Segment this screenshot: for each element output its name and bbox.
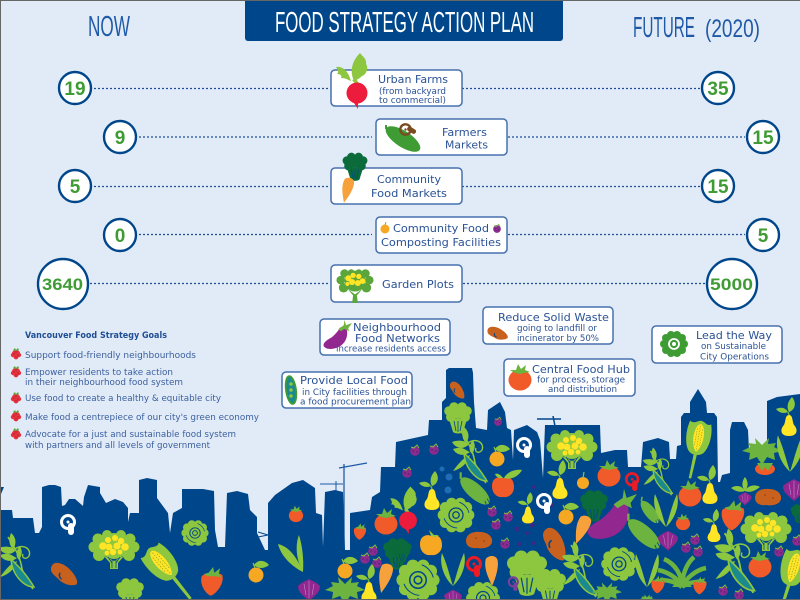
label: composting facilities: Composting Facilities [381,237,501,249]
vegetable: vine left [0,533,34,589]
vegetable: lettuce [601,547,637,581]
heading: future: (2020) [705,15,760,43]
vegetable: leaves [592,582,622,600]
callout text: Central Food Hub [532,364,630,376]
vegetable: tomato [748,551,772,578]
goal 1 [11,348,197,361]
vegetable: sprout [777,435,800,472]
box: composting facilities [376,217,507,253]
vegetable: broccoli [534,569,566,600]
goal 5: Advocate for a just and sustainable food system [25,430,236,440]
city skyline with vegetables [0,368,800,600]
future count 15: 15 [707,177,729,198]
vegetable: beet plant [731,477,760,505]
goal 2: in their neighbourhood food system [25,378,183,388]
vegetable: corn [770,547,800,600]
skyline corner tip [0,487,4,494]
box: farmers markets [376,119,507,155]
now count 5: 5 [70,177,81,198]
vegetable: small berries [402,417,502,478]
vegetable: strawberry [722,500,744,530]
vegetable: strawberries [651,576,707,594]
now count 0: 0 [115,226,125,247]
callout text: Increase residents access [336,344,447,354]
row: urban farms [59,53,734,109]
vegetable: corn [679,419,713,481]
vegetable: palm leaves [742,438,782,465]
vegetable: berries [718,535,800,600]
row: composting facilities [104,217,779,253]
goal 3: Use food to create a healthy & equitable city [25,394,221,404]
vegetable: pear [518,492,534,523]
box: community food markets [331,168,462,204]
callout text: for process, storage [537,376,625,386]
vegetable: kale [392,541,412,563]
vegetable: bush [658,557,706,587]
vegetable: cucumber [634,496,666,527]
label: community food markets: Food Markets [371,188,447,200]
vegetable: leaves [325,577,365,600]
construction cranes [258,416,561,550]
now count 3640 [38,259,88,309]
vegetable: eggplant [588,489,637,539]
callout text: Food Networks [355,333,440,345]
skyline silhouette [0,368,800,599]
future count 35 [702,72,734,104]
callout text [498,312,609,344]
vegetable: sprout [635,554,659,587]
callout text [300,375,411,408]
label: composting facilities [381,223,501,249]
title banner: FOOD STRATEGY ACTION PLAN [275,7,534,39]
future count 35: 35 [707,79,729,100]
vegetable: pear [703,509,720,542]
vegetable: broccoli flower [88,530,140,569]
now count 5 [59,170,91,202]
callout text: on Sustainable [701,342,766,352]
now count 9: 9 [115,128,125,149]
icon: mushroom [398,122,417,139]
label: community food markets [371,174,447,200]
box: urban farms [331,70,462,106]
callout: neighbourhood food networks [320,319,450,355]
vegetable: pear [356,564,377,600]
label: composting facilities: Community Food [393,223,489,235]
callout text: and distribution [548,385,617,395]
icon: sweet potato [487,327,508,340]
label: community food markets: Community [377,174,441,186]
callout text: Lead the Way [696,330,772,342]
vegetable: radish [390,487,417,534]
heading: now: NOW [88,11,130,43]
vegetable: small green [639,594,655,600]
vegetable: vine [714,528,755,593]
vegetable: blue dots [440,466,452,494]
vegetable: vine [643,448,672,495]
icon: tomato [508,364,532,390]
row: farmers markets [104,119,779,157]
callout text: Reduce Solid Waste [498,312,609,324]
future count 5000: 5000 [710,276,753,294]
future count 15 [747,121,779,153]
goal 2: Empower residents to take action [25,368,173,378]
vegetable: mushroom [518,438,530,458]
vegetable: mushroom [509,577,518,591]
vegetable: potato [466,532,492,548]
callout text: in City facilities through [302,388,407,398]
goal 2 [11,366,183,388]
goal 5 [11,428,236,451]
icon: cucumber [382,121,424,157]
vegetable: orange [577,472,589,489]
vegetable: berries [487,506,513,549]
vegetable: orange [248,561,269,582]
now count 3640: 3640 [42,276,83,294]
vegetable: tomato [374,508,398,534]
row: garden plots [38,259,757,309]
icon: orange [380,222,390,234]
vegetable: kale edge [791,504,800,523]
goals heading: Vancouver Food Strategy Goals [25,331,167,341]
vegetable: broccoli [507,551,547,596]
icon: eggplant [324,320,352,349]
vegetable: broccoli [444,402,472,434]
vegetable: orange [558,503,579,524]
vegetable: cucumber [456,472,494,509]
vegetable: lettuce [181,520,209,546]
vegetable: beet [298,579,320,600]
label: urban farms [378,74,448,106]
vegetable: broccoli [116,578,144,600]
vegetable: corn [138,540,202,600]
callout text: City Operations [700,352,770,362]
vegetable: pear [776,397,797,436]
goal 5: with partners and all levels of government [25,441,211,451]
vegetable: vine [452,427,487,483]
icon: berry [493,224,501,233]
label: garden plots: Garden Plots [382,279,454,291]
vegetable: tomato [676,514,690,530]
callout text [696,330,772,362]
callout text: Neighbourhood [353,322,441,334]
vegetable: sweet potato [446,380,469,400]
vegetable: orange [490,445,510,466]
vegetable: mushroom [626,473,638,491]
label: farmers markets: Markets [445,140,488,152]
icon: lettuce [660,331,688,357]
callout text: incinerator by 50% [517,334,599,344]
vegetable: pear [697,465,718,504]
icon: pea pod [284,375,298,405]
vegetable: sprout [654,494,678,527]
label: urban farms: to commercial) [379,96,446,106]
icon: kale [343,153,367,181]
goal 1: Support food-friendly neighbourhoods [25,351,197,361]
icon: broccoli flower [336,269,374,303]
row: community food markets [59,153,734,204]
now count 19 [59,72,91,104]
now count 0 [104,219,136,251]
vegetable: orange [338,557,358,578]
vegetable: berries [681,534,784,557]
goal 4: Make food a centrepiece of our city's green economy [25,413,259,423]
vegetable: dark dots [514,485,554,546]
callout text [336,322,447,354]
vegetable: sprout [441,553,465,586]
label: farmers markets [442,127,488,152]
heading: future: FUTURE [633,12,695,44]
future count 5000 [707,259,757,309]
vegetable: lettuce [466,582,500,600]
vegetable: cucumber [623,514,665,554]
vegetable: tomato [598,460,620,486]
now count 19: 19 [64,79,86,100]
vegetable: mushroom [538,494,550,514]
vegetable: mushroom [468,558,480,577]
vegetable: tomato [289,506,303,522]
vegetable: berries [360,545,382,568]
label: urban farms: (from backyard [379,87,446,97]
label: urban farms: Urban Farms [378,74,448,86]
callout text: a food procurement plan [300,398,411,408]
vegetable: strawberry [354,524,366,540]
vegetable: tomato [678,480,702,506]
callout: central food hub [504,359,635,396]
vegetable: lettuce [396,560,440,600]
callout text [532,364,630,395]
vegetable: potato [755,489,781,505]
future count 5: 5 [758,226,769,247]
vegetable: pear [547,460,568,499]
vegetable: kale [383,538,411,570]
vegetable: carrot [574,515,592,546]
vegetable: sweet potato [536,525,575,563]
icon: radish [336,53,368,109]
vegetable: apple orange [420,530,442,555]
vegetable: kale [580,490,608,522]
callout: provide local food [282,372,412,408]
vegetable: carrot [483,555,504,587]
vegetable: tomato [755,463,775,475]
callout: reduce solid waste [483,307,613,344]
vegetable: beet [658,531,678,551]
label: farmers markets: Farmers [442,127,487,139]
vegetable: sprout [278,535,303,572]
panel: vancouver food strategy goals [11,331,259,451]
future count 15: 15 [752,128,774,149]
vegetable: carrot [379,564,393,593]
box: garden plots [331,265,462,302]
now count 9 [104,121,136,153]
icon: carrot [342,178,354,203]
vegetable: beet [444,590,462,600]
callout: lead the way [652,326,782,363]
vegetable: lettuce [438,498,474,532]
vegetable: broccoli flower [546,430,598,469]
callout text: Provide Local Food [300,375,408,387]
future count 15 [702,170,734,202]
vegetable: sweet potato [48,561,81,587]
title banner [245,1,563,41]
vegetable: vine [562,541,597,597]
future count 5 [747,219,779,251]
vegetable: mushroom [62,516,74,535]
vegetable: broccoli flower [740,512,792,551]
vegetable: apple [492,470,522,497]
callout text: going to landfill or [517,324,598,334]
vegetable: pear [419,471,440,510]
vegetable: strawberry [201,567,223,596]
vegetable: beet [783,479,800,501]
